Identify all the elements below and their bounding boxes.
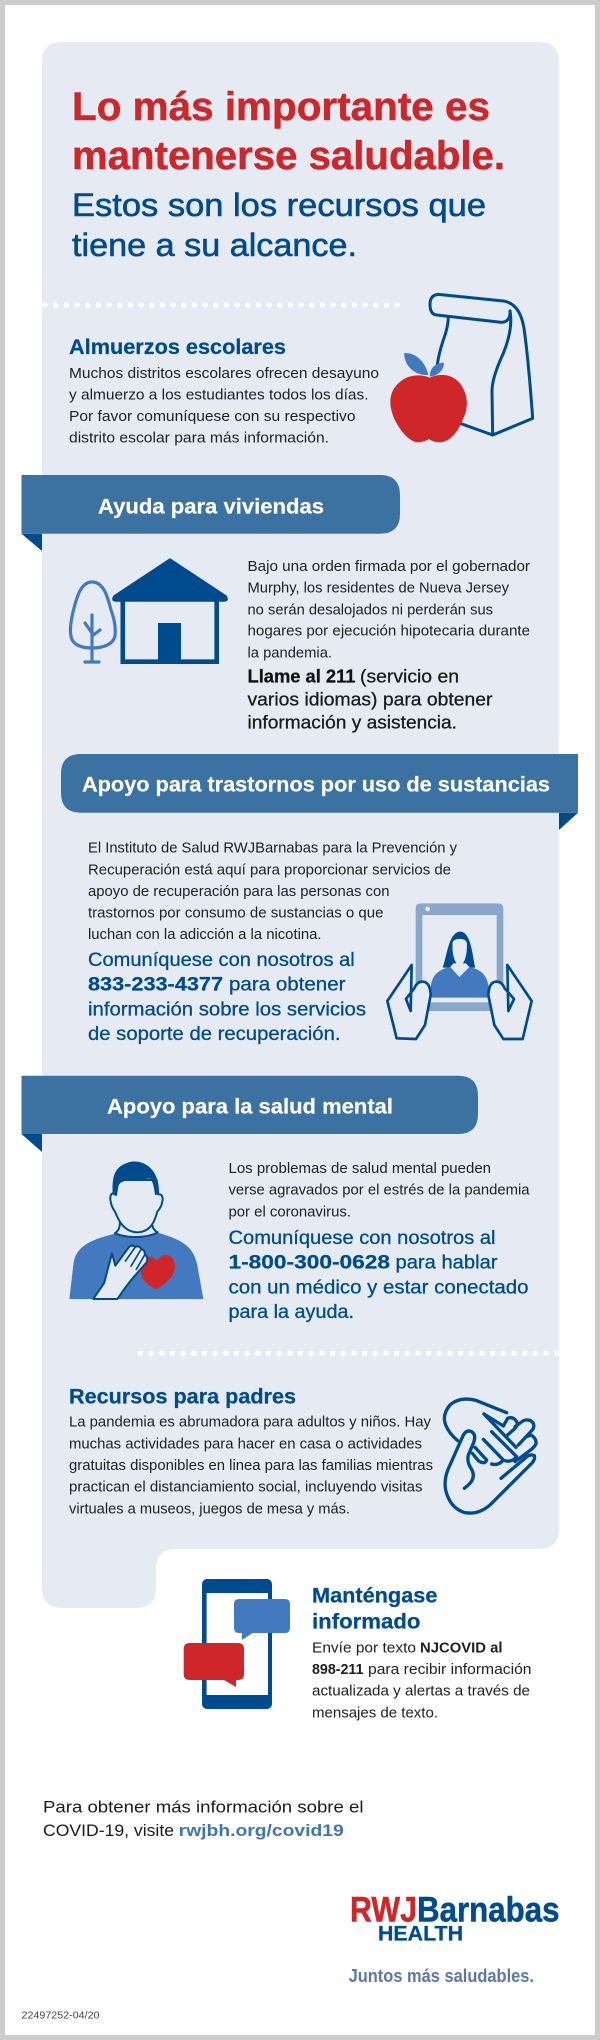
logo: RWJBarnabas Health: HEALTH [378,1923,463,1946]
text: more information [43,1797,364,1840]
panel: parent resources [69,1385,536,1517]
text: school lunches body [69,366,379,447]
text: mental health body: verse agravados por el estrés de la pandemia [228,1183,530,1199]
panel: main background [42,42,559,1608]
tagline: Juntos más saludables. [349,1965,534,1986]
subtitle: tiene a su alcance. [72,227,357,263]
text: stay informed body [312,1640,532,1721]
text: parent resources body: virtuales a museos, juegos de mesa y más. [69,1501,350,1517]
text: housing body [248,559,530,661]
heading: stay informed: Manténgase [312,1585,437,1608]
text: stay informed body: 898-211 [312,1662,364,1678]
text: parent resources body [69,1415,433,1517]
text: mental health body: por el coronavirus. [228,1204,351,1220]
callout: recovery phone: Comuníquese con nosotros al [88,950,355,971]
logo: RWJBarnabas Health: RWJ [350,1890,417,1929]
text: housing body: no serán desalojados ni perderán sus [248,602,493,618]
text: stay informed body: para recibir información [368,1662,532,1678]
text: school lunches body: distrito escolar para más información. [69,431,329,447]
icon: tree [70,582,115,662]
text: more information: Para obtener más información sobre el [43,1797,364,1816]
text: housing body: Bajo una orden firmada por el gobernador [248,559,530,575]
text: substance use body: apoyo de recuperación para las personas con [88,884,390,900]
callout: recovery phone: de soporte de recuperación. [88,1024,340,1045]
callout: mental health phone: 1-800-300-0628 [228,1253,390,1274]
text: school lunches body: Muchos distritos escolares ofrecen desayuno [69,366,379,382]
callout: recovery phone: para obtener [229,975,346,996]
icon: holding hands [444,1399,536,1513]
text: parent resources body: practican el distanciamiento social, incluyendo visitas [69,1480,422,1496]
banner: substance use: Apoyo para trastornos por uso de sustancias [82,773,550,797]
text: mental health body [228,1161,530,1220]
text: housing body: hogares por ejecución hipotecaria durante [248,624,530,640]
subtitle [72,187,486,263]
text: stay informed body: actualizada y alertas a través de [312,1684,530,1700]
callout: call 211: (servicio en [360,666,459,687]
text: school lunches body: Por favor comuníquese con su respectivo [69,409,356,425]
panel: school lunches [69,294,533,447]
icon: house [113,559,227,662]
heading: stay informed [312,1585,437,1633]
text: stay informed body: NJCOVID al [420,1640,502,1656]
banner: mental health: Apoyo para la salud mental [107,1094,393,1118]
banner: substance use [61,754,578,830]
callout: call 211: varios idiomas) para obtener [248,689,492,710]
text: housing body: la pandemia. [248,645,332,661]
icon: man with hand on heart [69,1161,203,1299]
text: parent resources body: muchas actividades para hacer en casa o actividades [69,1436,422,1452]
callout: mental health phone: para hablar [396,1253,498,1274]
callout: mental health phone: con un médico y estar conectado [228,1277,528,1298]
icon: tablet video call [387,903,532,1039]
callout: mental health phone: para la ayuda. [228,1302,354,1323]
text: substance use body [88,841,458,943]
callout: call 211: Llame al 211 [248,666,356,687]
text: parent resources body: La pandemia es abrumadora para adultos y niños. Hay [69,1415,432,1431]
text: stay informed body: Envíe por texto [312,1640,416,1656]
logo: RWJBarnabas Health: Barnabas [417,1890,560,1929]
text: substance use body: Recuperación está aquí para proporcionar servicios de [88,862,451,878]
text: substance use body: El Instituto de Salud RWJBarnabas para la Prevención y [88,841,458,857]
title: Lo más importante es [72,85,490,129]
heading: school lunches: Almuerzos escolares [69,336,286,359]
title: mantenerse saludable. [72,134,505,178]
callout: call 211 [248,666,492,732]
callout: call 211: información y asistencia. [248,711,457,732]
text: more information: COVID-19, visite [43,1821,174,1840]
heading: stay informed: informado [312,1610,420,1633]
subtitle: Estos son los recursos que [72,187,486,223]
icon: lunch bag and apple [390,294,533,442]
callout: mental health phone [228,1228,528,1323]
heading: parent resources: Recursos para padres [69,1385,296,1408]
text: mental health body: Los problemas de salud mental pueden [228,1161,491,1177]
callout: recovery phone: 833-233-4377 [88,975,223,996]
text: school lunches body: y almuerzo a los estudiantes todos los días. [69,388,368,404]
callout: recovery phone [88,950,366,1045]
text: more information: rwjbh.org/covid19 [179,1821,344,1840]
text: parent resources body: gratuitas disponibles en linea para las familias mientras [69,1458,433,1474]
banner: housing [22,475,400,551]
icon: phone with chat bubbles [184,1579,290,1709]
banner: mental health [22,1076,478,1152]
callout: recovery phone: información sobre los servicios [88,999,366,1020]
banner: housing: Ayuda para viviendas [98,494,324,518]
logo: RWJBarnabas Health [350,1890,560,1946]
title [72,85,505,178]
document code: 22497252-04/20 [22,2011,100,2022]
text: substance use body: luchan con la adicción a la nicotina. [88,927,322,943]
text: stay informed body: mensajes de texto. [312,1705,438,1721]
text: housing body: Murphy, los residentes de Nueva Jersey [248,581,510,597]
text: substance use body: trastornos por consumo de sustancias o que [88,905,384,921]
callout: mental health phone: Comuníquese con nosotros al [228,1228,496,1249]
